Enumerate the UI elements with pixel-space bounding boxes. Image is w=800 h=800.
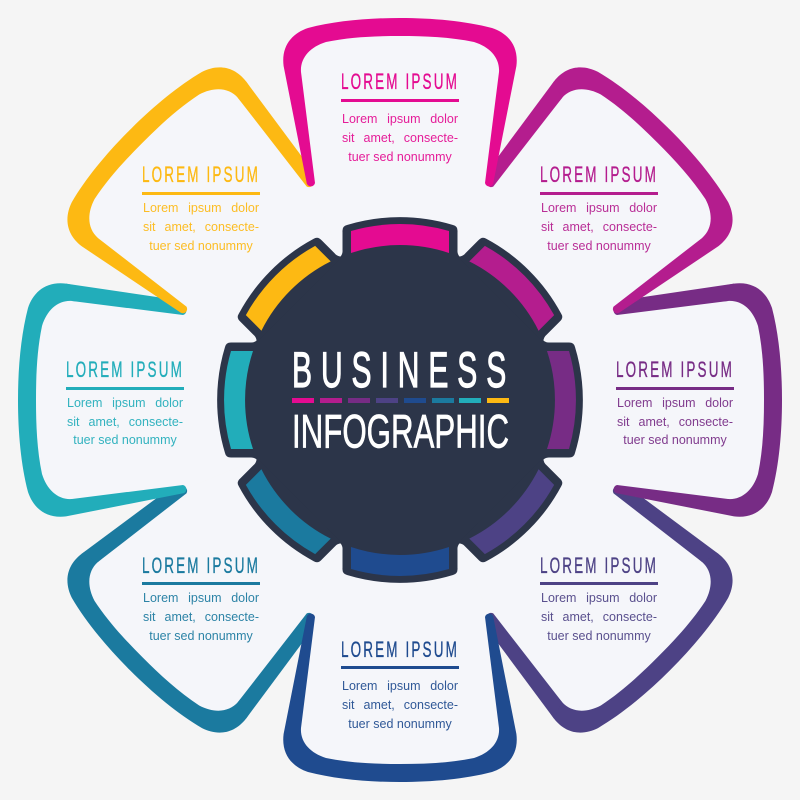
hub segment: violet xyxy=(469,469,559,559)
hub segment: dark teal xyxy=(241,469,331,559)
text block: bottom, blue: LOREM IPSUM xyxy=(341,636,459,662)
text block: bottom, blue: tuer sed nonummy xyxy=(348,717,452,731)
petal outline: blue xyxy=(283,614,517,782)
text block: top left, yellow xyxy=(142,162,260,252)
hub segment: magenta xyxy=(469,241,559,331)
text block: top, pink: tuer sed nonummy xyxy=(348,150,452,164)
text block: bottom left, dark teal: LOREM IPSUM xyxy=(142,552,260,578)
text block: bottom right, violet: sit amet, consecte- xyxy=(541,610,657,624)
hub segment: purple xyxy=(547,351,576,449)
text block: top right, magenta: LOREM IPSUM xyxy=(540,162,658,187)
text block: bottom right, violet: tuer sed nonummy xyxy=(547,629,651,643)
text block: top right, magenta: tuer sed nonummy xyxy=(547,238,651,252)
text block: bottom left, dark teal: sit amet, consecte- xyxy=(143,610,259,624)
text block: left, teal: tuer sed nonummy xyxy=(73,433,177,447)
text block: right, purple: sit amet, consecte- xyxy=(617,414,733,428)
text block: top left, yellow: Lorem ipsum dolor xyxy=(143,201,259,215)
central hub xyxy=(217,217,583,583)
text block: top right, magenta xyxy=(540,162,658,252)
petal outline: violet xyxy=(468,468,753,753)
hub segment: yellow xyxy=(241,241,331,331)
hub segment: teal xyxy=(224,351,253,449)
text block: top left, yellow: sit amet, consecte- xyxy=(143,220,259,234)
text block: bottom right, violet: Lorem ipsum dolor xyxy=(541,591,657,605)
text block: bottom left, dark teal: Lorem ipsum dolor xyxy=(143,591,259,605)
text block: bottom, blue: Lorem ipsum dolor xyxy=(342,679,458,693)
text block: top, pink: Lorem ipsum dolor xyxy=(342,112,458,126)
text block: top, pink xyxy=(341,69,459,164)
text block: top, pink: sit amet, consecte- xyxy=(342,131,458,145)
text block: right, purple: Lorem ipsum dolor xyxy=(617,396,733,410)
text block: left, teal: Lorem ipsum dolor xyxy=(67,396,183,410)
text block: bottom, blue: sit amet, consecte- xyxy=(342,698,458,712)
text block: top right, magenta: Lorem ipsum dolor xyxy=(541,201,657,215)
text block: bottom right, violet: LOREM IPSUM xyxy=(540,552,658,578)
text block: left, teal xyxy=(66,357,184,447)
text block: top left, yellow: tuer sed nonummy xyxy=(149,238,253,252)
colour dash row xyxy=(292,398,509,403)
text block: bottom right, violet xyxy=(540,552,658,643)
text block: bottom left, dark teal: tuer sed nonummy xyxy=(149,629,253,643)
hub segment: blue xyxy=(351,547,449,576)
text block: left, teal: LOREM IPSUM xyxy=(66,357,184,382)
text block: top right, magenta: sit amet, consecte- xyxy=(541,220,657,234)
petal outline: yellow xyxy=(47,47,332,332)
title: INFOGRAPHIC: INFOGRAPHIC xyxy=(292,406,509,458)
petal outline: teal xyxy=(18,283,186,517)
text block: bottom left, dark teal xyxy=(142,552,260,643)
petal outline: dark teal xyxy=(47,468,332,753)
petal outline: pink xyxy=(283,18,517,186)
petal outline: purple xyxy=(614,283,782,517)
petal outline: magenta xyxy=(468,47,753,332)
text block: top left, yellow: LOREM IPSUM xyxy=(142,162,260,187)
title: BUSINESS: BUSINESS xyxy=(292,342,515,398)
text block: left, teal: sit amet, consecte- xyxy=(67,414,183,428)
text block: right, purple xyxy=(616,357,734,447)
text block: top, pink: LOREM IPSUM xyxy=(341,69,459,94)
text block: right, purple: tuer sed nonummy xyxy=(623,433,727,447)
hub segment: pink xyxy=(351,224,449,253)
text block: bottom, blue xyxy=(341,636,459,731)
text block: right, purple: LOREM IPSUM xyxy=(616,357,734,382)
